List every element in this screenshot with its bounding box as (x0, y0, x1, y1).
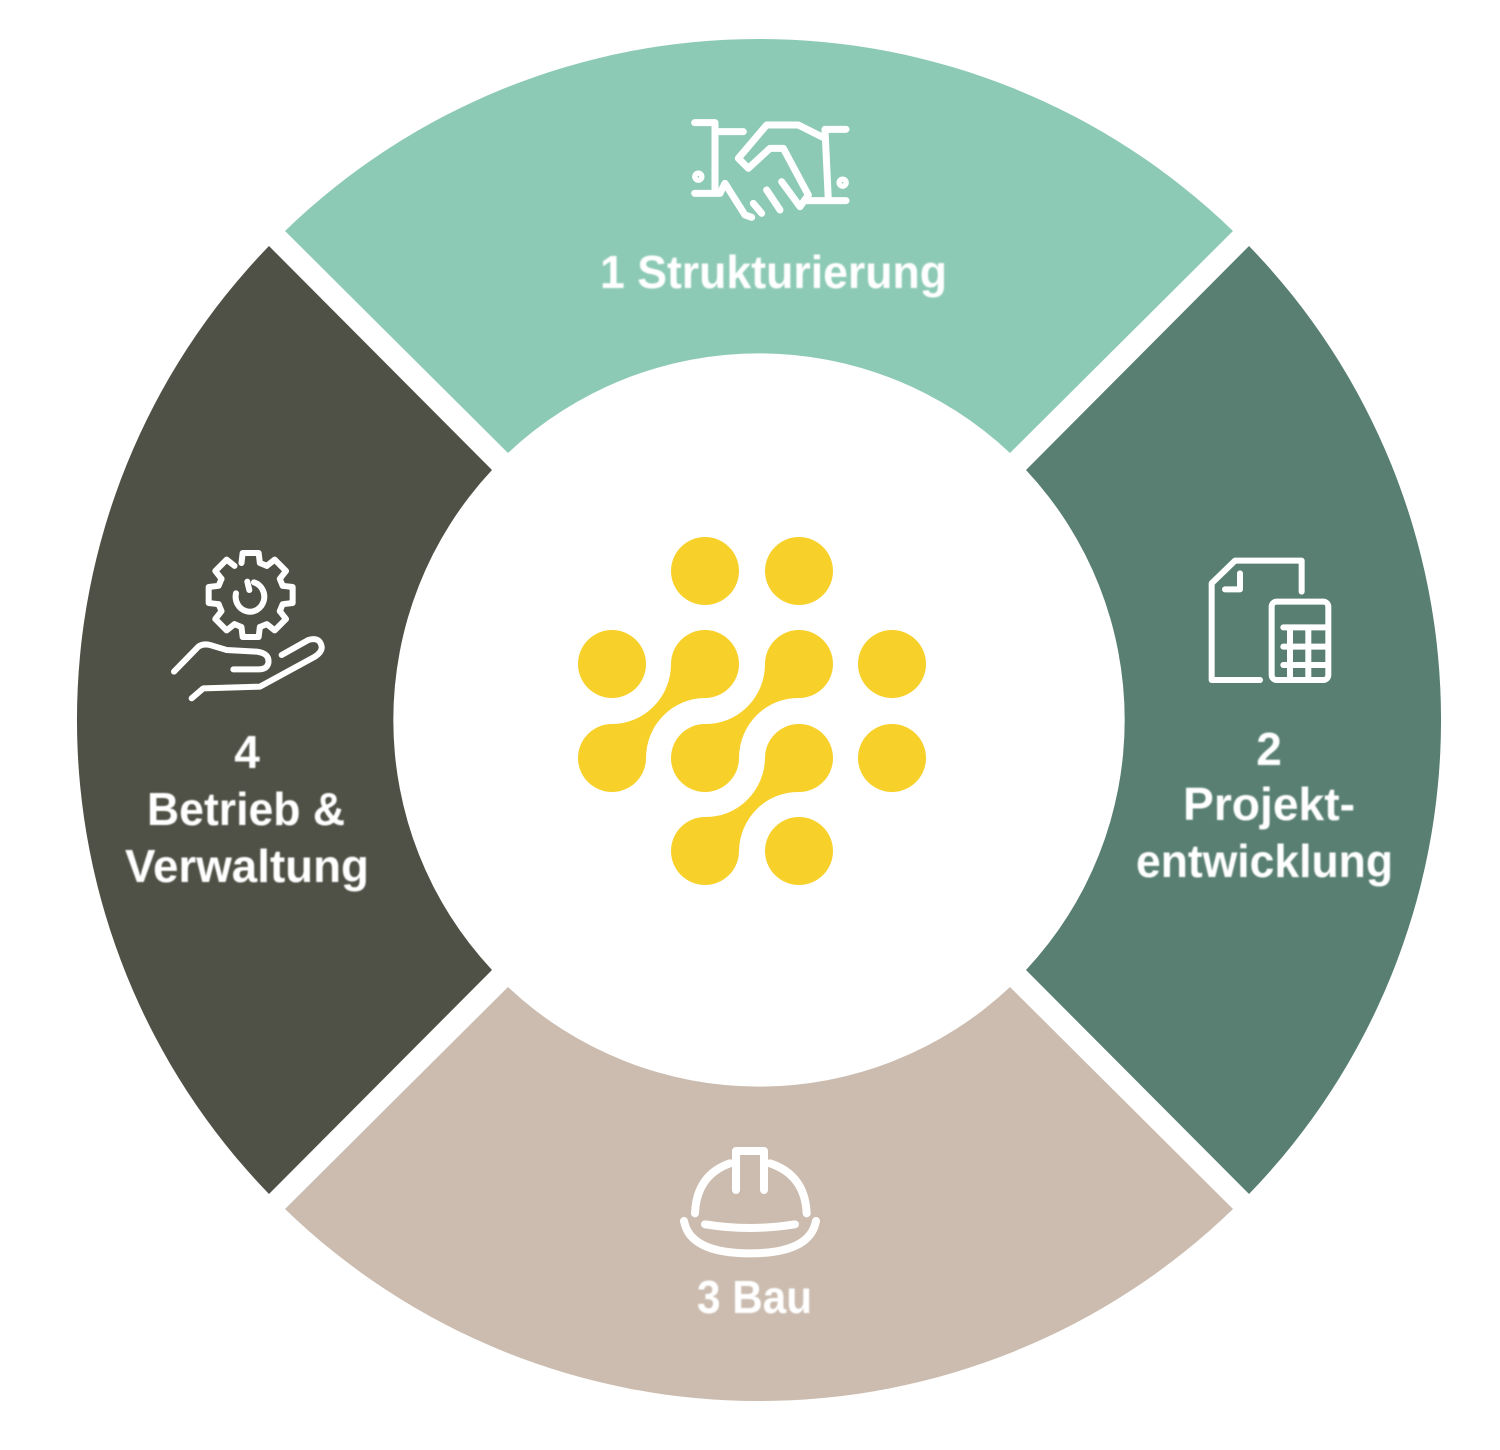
segment: taupe (285, 987, 1233, 1401)
label: 3 Bau: 3 Bau (697, 1271, 812, 1323)
segment: green (1026, 246, 1441, 1194)
panel: 2 Projektentwicklung (1026, 246, 1441, 1194)
label: 4 Betrieb & Verwaltung (125, 726, 369, 892)
logo: yellow dots (578, 537, 926, 885)
label: 4 Betrieb & Verwaltung: Betrieb & (147, 783, 345, 835)
icon: document and calculator (1212, 561, 1328, 680)
icon: hard hat (684, 1151, 816, 1253)
label: 4 Betrieb & Verwaltung: 4 (234, 726, 260, 778)
panel: 4 Betrieb & Verwaltung (77, 246, 492, 1194)
label: 2 Projektentwicklung: entwicklung (1136, 835, 1393, 887)
label: 4 Betrieb & Verwaltung: Verwaltung (125, 840, 369, 892)
panel: 1 Strukturierung (285, 39, 1233, 453)
label: 1 Strukturierung: 1 Strukturierung (600, 246, 947, 298)
icon: handshake (695, 123, 846, 217)
label: 2 Projektentwicklung (1136, 723, 1393, 887)
icon: gear in hand (174, 553, 322, 698)
label: 2 Projektentwicklung: Projekt- (1183, 778, 1355, 830)
segment: dark (77, 246, 492, 1194)
segment: teal (285, 39, 1233, 453)
label: 2 Projektentwicklung: 2 (1256, 723, 1282, 775)
panel: 3 Bau (285, 987, 1233, 1401)
